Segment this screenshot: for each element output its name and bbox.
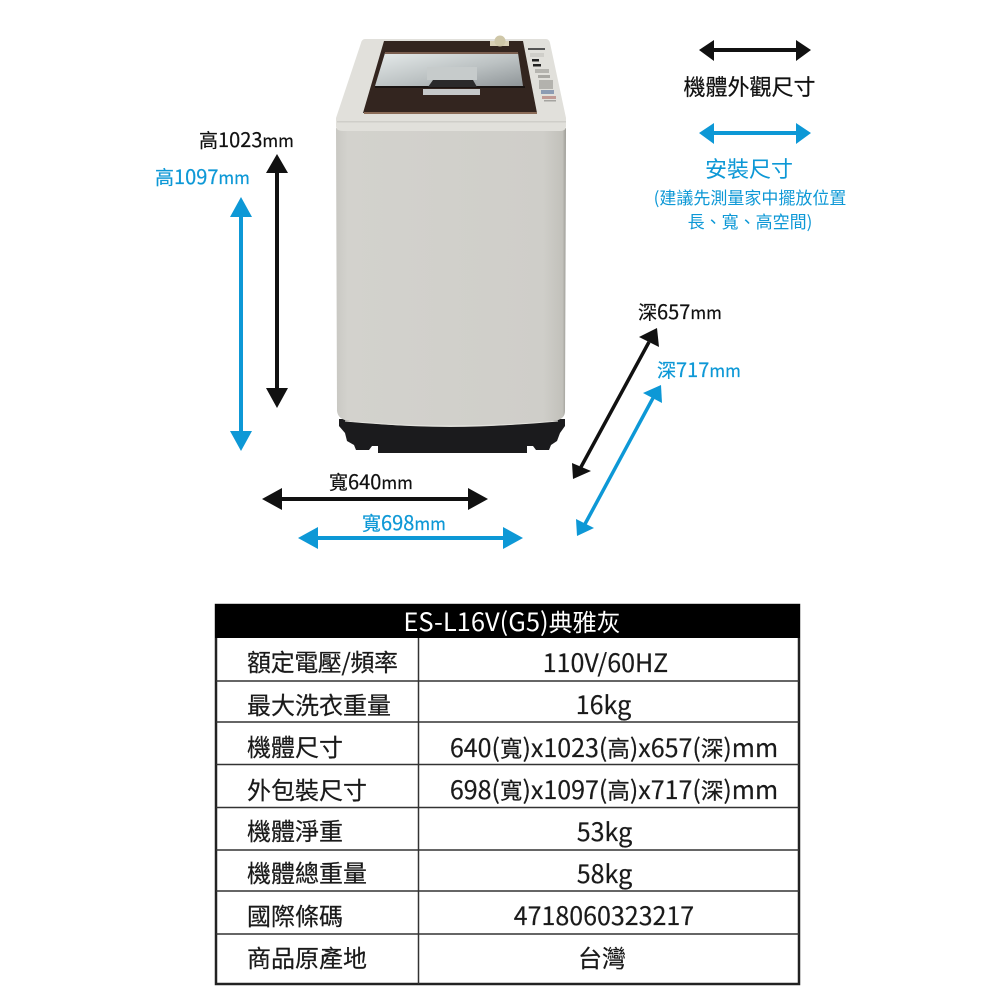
row: origin: 商品原產地 bbox=[247, 939, 367, 974]
row: origin bbox=[247, 939, 626, 974]
row: max wash load bbox=[247, 686, 631, 722]
machine top rim bbox=[336, 39, 566, 131]
row: machine size: 機體尺寸 bbox=[247, 728, 343, 763]
lid window bbox=[375, 53, 523, 86]
row: net weight: 53kg bbox=[577, 813, 632, 849]
row: gross weight: 58kg bbox=[577, 855, 632, 891]
table frame bbox=[216, 605, 799, 984]
legend arrow: machine dimensions bbox=[699, 40, 811, 61]
arrow: depth 657mm bbox=[572, 328, 659, 479]
lid handle bbox=[423, 89, 480, 95]
row: package size: 外包裝尺寸 bbox=[247, 771, 367, 806]
table header bbox=[215, 602, 800, 639]
row: package size: 698(寬)x1097(高)x717(深)mm bbox=[450, 771, 778, 807]
label: height 1097mm: 高1097mm bbox=[155, 161, 250, 190]
row: gross weight bbox=[247, 854, 632, 891]
specification table bbox=[215, 602, 800, 984]
row: barcode: 國際條碼 bbox=[247, 897, 343, 932]
row: max wash load: 最大洗衣重量 bbox=[247, 686, 391, 721]
arrow: height 1023mm bbox=[266, 154, 288, 408]
arrow: depth 717mm bbox=[576, 385, 662, 536]
label: depth 717mm: 深717mm bbox=[657, 354, 741, 383]
row: machine size: 640(寬)x1023(高)x657(深)mm bbox=[450, 729, 778, 765]
legend text: machine dimensions: 機體外觀尺寸 bbox=[683, 70, 816, 102]
label: depth 657mm: 深657mm bbox=[638, 296, 722, 325]
row: rated voltage: 額定電壓/頻率 bbox=[247, 643, 398, 678]
row: rated voltage bbox=[247, 643, 668, 680]
washing machine product image bbox=[336, 36, 566, 453]
legend note: installation advice: (建議先測量家中擺放位置 bbox=[654, 184, 846, 209]
glass lid bbox=[363, 41, 537, 113]
row: net weight: 機體淨重 bbox=[247, 812, 343, 847]
row: package size bbox=[247, 771, 778, 807]
label: height 1023mm: 高1023mm bbox=[199, 124, 294, 153]
legend note: installation advice bbox=[654, 184, 846, 233]
arrow: height 1097mm bbox=[230, 197, 252, 451]
legend text: installation dimensions: 安裝尺寸 bbox=[705, 152, 793, 184]
row: origin: 台灣 bbox=[578, 939, 626, 974]
row: barcode: 4718060323217 bbox=[514, 897, 694, 933]
arrow: width 640mm bbox=[262, 488, 488, 510]
row: gross weight: 機體總重量 bbox=[247, 854, 367, 889]
control panel bbox=[528, 48, 556, 102]
legend note: installation advice: 長、寬、高空間) bbox=[688, 208, 812, 233]
legend arrow: installation dimensions bbox=[699, 123, 811, 144]
table header: ES-L16V(G5)典雅灰 bbox=[403, 602, 621, 639]
table grid bbox=[216, 638, 799, 984]
label: width 640mm: 寬640mm bbox=[329, 466, 413, 495]
arrow: width 698mm bbox=[298, 527, 523, 549]
machine base bbox=[339, 419, 565, 453]
machine body bbox=[336, 128, 566, 427]
selector knob bbox=[490, 41, 509, 46]
row: rated voltage: 110V/60HZ bbox=[543, 644, 668, 680]
row: machine size bbox=[247, 728, 778, 765]
label: width 698mm: 寬698mm bbox=[362, 507, 446, 536]
row: net weight bbox=[247, 812, 632, 849]
row: barcode bbox=[247, 897, 694, 933]
row: max wash load: 16kg bbox=[576, 686, 631, 722]
